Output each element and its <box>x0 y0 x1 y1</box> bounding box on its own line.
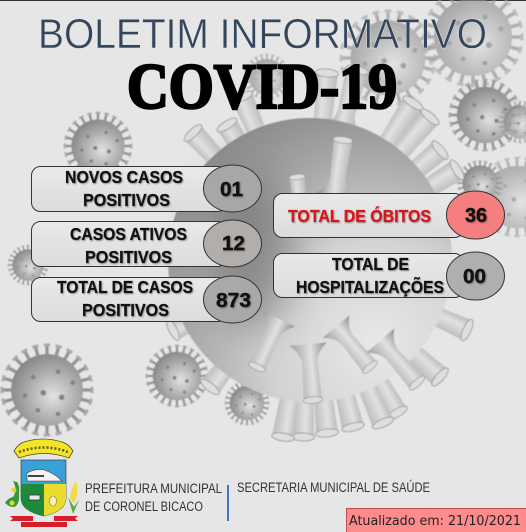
value: 873: 873 <box>216 290 251 312</box>
label: total de hospitalizacoes <box>296 254 444 297</box>
label: casos ativos positivos: CASOS ATIVOS <box>70 224 187 244</box>
panel: novos casos positivos <box>32 165 262 212</box>
panel: total de obitos <box>274 191 504 239</box>
label: total de casos positivos: TOTAL DE CASOS <box>57 277 193 297</box>
panel: casos ativos positivos <box>32 220 262 267</box>
label: novos casos positivos: POSITIVOS <box>83 190 170 210</box>
label: total de casos positivos: POSITIVOS <box>82 300 169 320</box>
title: covid-19: COVID-19 <box>127 51 397 123</box>
panel: total de casos positivos <box>32 276 262 323</box>
value: 01: 01 <box>220 179 243 201</box>
value: 00: 00 <box>463 266 486 288</box>
panel: total de hospitalizacoes <box>274 252 504 300</box>
label: total de hospitalizacoes: HOSPITALIZAÇÕES <box>296 276 444 297</box>
icon: municipal coat of arms <box>5 439 79 527</box>
label: total de hospitalizacoes: TOTAL DE <box>332 254 409 274</box>
text: secretaria municipal de saude: SECRETARIA MUNICIPAL DE SAÚDE <box>237 480 430 495</box>
main coronavirus illustration <box>159 61 480 444</box>
text: prefeitura municipal de coronel bicaco: DE CORONEL BICACO <box>85 499 203 514</box>
value: 36: 36 <box>465 205 487 227</box>
text: prefeitura municipal de coronel bicaco: PREFEITURA MUNICIPAL <box>85 481 222 496</box>
label: total de obitos: TOTAL DE ÓBITOS <box>288 205 431 226</box>
label: total de casos positivos <box>57 277 193 320</box>
label: casos ativos positivos: POSITIVOS <box>85 247 172 267</box>
value: 12: 12 <box>222 233 245 255</box>
label: novos casos positivos: NOVOS CASOS <box>65 167 183 187</box>
label: casos ativos positivos <box>70 224 187 267</box>
title: boletim informativo: BOLETIM INFORMATIVO <box>38 10 487 57</box>
callout: update date <box>346 508 526 532</box>
label: novos casos positivos <box>65 167 183 210</box>
text: prefeitura municipal de coronel bicaco <box>85 481 222 514</box>
